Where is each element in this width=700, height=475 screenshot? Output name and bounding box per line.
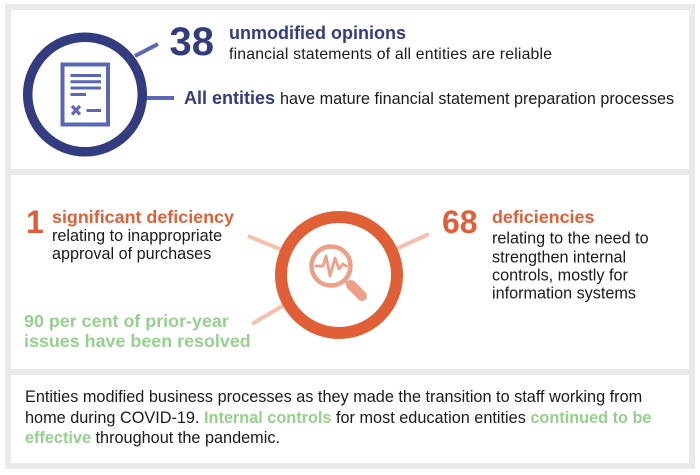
- text: summary: throughout the pandemic.: [91, 429, 280, 447]
- stat: 38: 38: [170, 20, 214, 64]
- text: summary: effective: [25, 429, 91, 447]
- connector: opinions: [135, 44, 158, 56]
- panel: deficiencies: [11, 175, 689, 369]
- connector: 68 deficiencies: [396, 234, 429, 249]
- text: summary: Internal controls for most education entities continued to be: [204, 409, 651, 427]
- text: purchases: relating to inappropriate: [52, 227, 222, 245]
- text: prior-year issues: issues have been resolved: [24, 331, 251, 351]
- text: all entities: All entities have mature financial statement preparation processes: [184, 88, 674, 108]
- text: reliable statements: financial statements of all entities are reliable: [229, 46, 552, 63]
- connector: resolved issues: [252, 305, 284, 324]
- heading: deficiencies: deficiencies: [492, 207, 594, 227]
- panel: covid summary: [11, 375, 689, 463]
- text: summary: home during COVID-19.: [25, 409, 204, 427]
- heading: significant deficiency: significant deficiency: [52, 207, 234, 227]
- connector: all entities: [146, 96, 174, 100]
- text: summary: Entities modified business processes as they made the transition to staff working from: [25, 388, 642, 406]
- text: internal controls: controls, mostly for: [492, 266, 628, 284]
- stat: 68: 68: [442, 204, 478, 240]
- icon: document in circle: [28, 37, 142, 152]
- panel: audit opinions: [11, 10, 689, 169]
- text: internal controls: information systems: [492, 284, 636, 302]
- icon: magnifier in circle: [281, 217, 397, 333]
- text: prior-year issues: 90 per cent of prior-year: [24, 311, 229, 331]
- text: internal controls: strengthen internal: [492, 248, 626, 266]
- heading: unmodified opinions: unmodified opinions: [229, 23, 406, 43]
- connector: significant deficiency: [248, 236, 282, 250]
- stat: 1: 1: [26, 204, 44, 240]
- text: purchases: approval of purchases: [52, 245, 211, 263]
- text: internal controls: relating to the need to: [492, 230, 649, 248]
